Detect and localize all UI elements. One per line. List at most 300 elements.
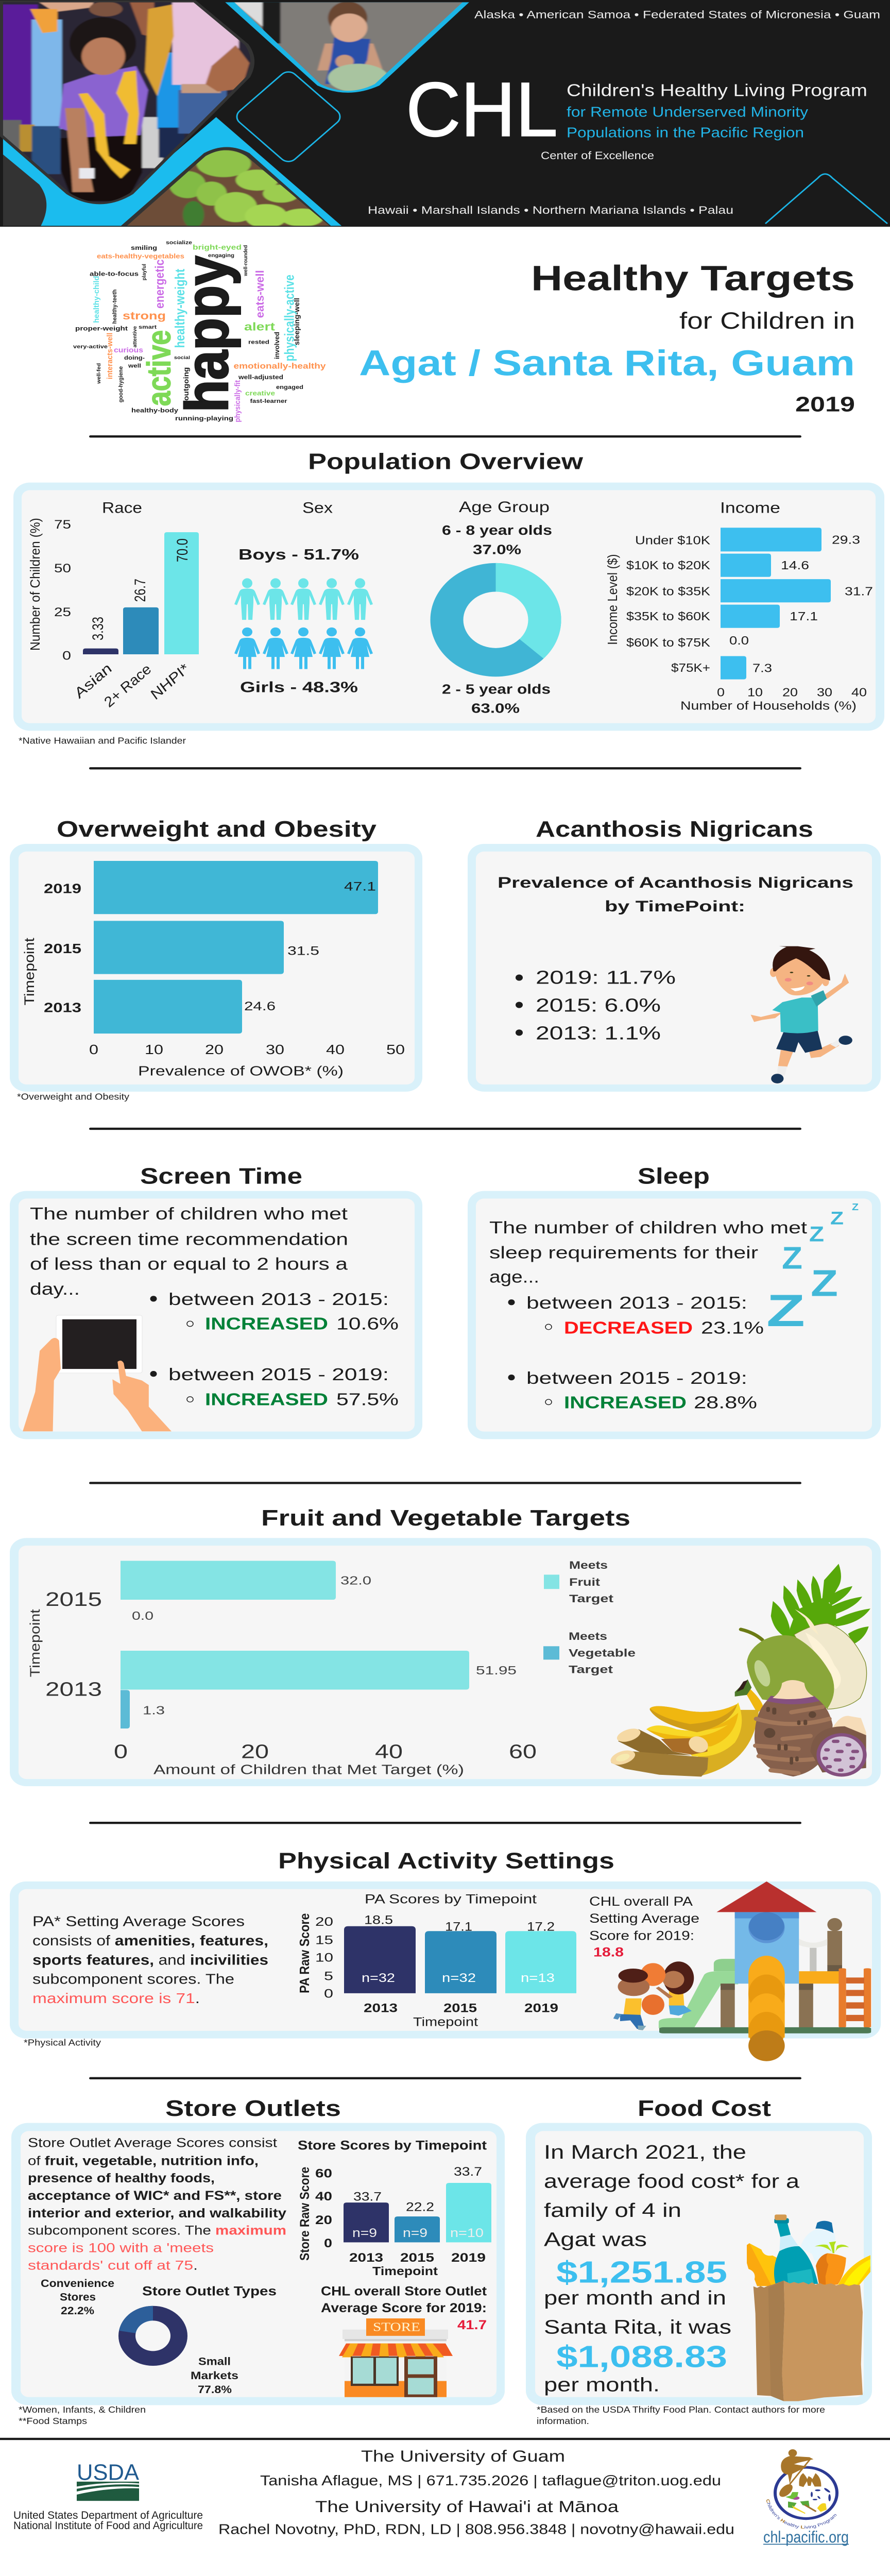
diamond outline (233, 69, 344, 165)
bar chart: OWOB: 31.5 (287, 943, 319, 958)
heading: Sleep: Sleep (638, 1164, 710, 1189)
bar chart: fruit and vegetable: Timepoint (28, 1609, 43, 1677)
word cloud: healthy-child (92, 276, 100, 323)
food cost text: In March 2021, the (544, 2141, 746, 2163)
chart: income: 17.1 (790, 610, 818, 623)
food cost text: family of 4 in (544, 2199, 681, 2221)
region list bottom: Hawaii • Marshall Islands • Northern Mariana Islands • Palau (368, 204, 733, 216)
description text (28, 2135, 286, 2273)
description text: sports features, and incivilities (32, 1952, 268, 1968)
heading: Overweight and Obesity: Overweight and Obesity (57, 817, 376, 841)
word cloud: outgoing (182, 367, 190, 401)
bar chart: PA scores: n=13 (521, 1971, 555, 1985)
panel: physical activity settings (10, 1882, 881, 2039)
food cost text: per month. (544, 2374, 660, 2396)
header banner (0, 0, 890, 228)
bar chart: store scores: Store Raw Score (298, 2167, 312, 2261)
word cloud: energetic (153, 259, 166, 309)
description text: presence of healthy foods, (28, 2171, 215, 2185)
legend: Target (569, 1664, 613, 1675)
change list: INCREASED (205, 1314, 328, 1333)
legend: Target (569, 1593, 614, 1605)
dark corner shape (3, 155, 46, 226)
word cloud: smiling (131, 244, 157, 251)
footnote: food plan: *Based on the USDA Thrifty Food Plan. Contact authors for more (537, 2404, 825, 2415)
description text: maximum score is 71 . (32, 1991, 200, 2007)
chart: race: NHPI* (146, 661, 194, 702)
intro text: day... (30, 1279, 80, 1298)
bullet list: 2015: 6.0% (536, 995, 661, 1016)
word cloud: well-fed (96, 363, 101, 384)
photo: children with leis (0, 0, 272, 210)
curved program name: C hildren's Healthy Living Program (766, 2499, 837, 2529)
footnote: WIC and FS: **Food Stamps (19, 2416, 87, 2426)
bar chart: fruit and vegetable: 20 (241, 1740, 269, 1762)
heading: Acanthosis Nigricans: Acanthosis Nigricans (536, 817, 813, 841)
bar chart: PA scores: n=32 (362, 1971, 395, 1985)
food cost text: Santa Rita, it was (544, 2316, 731, 2338)
description text (32, 1914, 268, 2007)
chart: race: 70.0 (174, 538, 191, 562)
word cloud: active (141, 330, 177, 406)
description text: PA* Setting Average Scores (32, 1914, 245, 1929)
bar chart: PA scores: 17.2 (527, 1919, 555, 1934)
panel: sleep (468, 1191, 881, 1439)
title block (359, 258, 855, 416)
chart: store outlet types donut (41, 2277, 277, 2396)
overall store score callout: Average Score for 2019: (321, 2300, 487, 2315)
icon: sleeping Zs (766, 1202, 859, 1336)
bar chart: store scores: 20 (315, 2213, 332, 2227)
bar chart: PA scores: PA Raw Score (298, 1913, 312, 1993)
title block: Agat / Santa Rita, Guam (359, 343, 855, 383)
chart: race: 26.7 (131, 579, 148, 602)
word cloud: involved (273, 332, 281, 359)
photo: toddler holding greens (225, 2, 469, 93)
word cloud: well-adjusted (238, 374, 283, 381)
chart: sex: Boys - 51.7% (238, 546, 359, 563)
heading: Physical Activity Settings: Physical Activity Settings (278, 1849, 614, 1873)
word cloud: socialize (166, 240, 192, 246)
change list: INCREASED (205, 1390, 328, 1409)
change list: between 2013 - 2015: (526, 1293, 747, 1312)
footnote: PA: *Physical Activity (24, 2038, 101, 2047)
chart: income: 10 (747, 686, 763, 699)
logo: CHL program (766, 2449, 838, 2529)
word cloud: strong (123, 310, 166, 321)
change list: 28.8% (694, 1393, 757, 1412)
footnote: OWOB: *Overweight and Obesity (17, 1092, 130, 1101)
program name: Children's Healthy Living Program (567, 81, 867, 100)
chart: income: 0 (717, 686, 725, 699)
word cloud: eats-healthy-vegetables (97, 252, 184, 260)
icon: grocery bag (747, 2214, 870, 2401)
overall PA score callout (589, 1894, 699, 1959)
icon: boys row (234, 578, 373, 620)
icon: running boy (751, 946, 852, 1083)
bar chart: store scores: Store Scores by Timepoint (298, 2138, 487, 2153)
bar chart: OWOB: 47.1 (344, 879, 376, 893)
intro text: The number of children who met (489, 1218, 807, 1238)
word cloud: attentive (132, 326, 138, 347)
heading: Population Overview: Population Overview (308, 449, 584, 474)
change list: 57.5% (336, 1390, 399, 1409)
chart: store outlet types donut: Markets (191, 2369, 238, 2382)
word cloud: very-active (73, 344, 108, 350)
bar chart: fruit and vegetable: 2013 (45, 1678, 102, 1700)
word cloud: good-hygiene (118, 366, 124, 402)
word cloud: physically-active (282, 275, 297, 361)
description text: of fruit, vegetable, nutrition info, (28, 2153, 259, 2168)
bar chart: PA scores: 5 (324, 1969, 333, 1983)
legend (543, 1560, 636, 1675)
chart: income: 20 (782, 686, 798, 699)
bar chart: OWOB: 0 (89, 1042, 98, 1057)
program name: Center of Excellence (541, 149, 654, 162)
bullet list (516, 967, 676, 1044)
chart: sex (234, 499, 373, 696)
change list: 10.6% (336, 1314, 399, 1333)
blue triangle backdrop (3, 117, 341, 226)
footnote: WIC and FS: *Women, Infants, & Children (19, 2404, 146, 2415)
bar chart: store scores: 2019 (451, 2250, 486, 2264)
legend: Meets (569, 1631, 607, 1642)
title block: Healthy Targets (531, 258, 855, 298)
word cloud: creative (245, 389, 275, 397)
bar chart: PA scores (298, 1891, 576, 2029)
word cloud: engaging (208, 253, 234, 259)
bar chart: fruit and vegetable: 40 (375, 1740, 403, 1762)
chart: race: 3.33 (89, 617, 106, 640)
word cloud: social (174, 355, 190, 361)
chart: store outlet types donut: 77.8% (198, 2383, 232, 2396)
word cloud: proper-weight (75, 325, 128, 332)
heading: Fruit and Vegetable Targets: Fruit and Vegetable Targets (261, 1505, 630, 1530)
bar chart: OWOB: 24.6 (244, 999, 276, 1013)
bar chart: fruit and vegetable (28, 1561, 537, 1777)
awning (339, 2344, 453, 2358)
overall PA score callout: Setting Average (589, 1911, 699, 1925)
icon: sleeping Zs: Z (766, 1285, 805, 1336)
footer contacts: The University of Hawai'i at Mānoa (315, 2498, 619, 2516)
bar chart: fruit and vegetable: 51.95 (476, 1664, 517, 1677)
word cloud: healthy-body (131, 406, 179, 414)
icon: store front (339, 2318, 453, 2397)
bar chart: store scores: 40 (315, 2189, 332, 2203)
chart: income (606, 499, 873, 713)
bar chart: PA scores: PA Scores by Timepoint (365, 1891, 537, 1906)
change list: between 2015 - 2019: (168, 1365, 389, 1384)
description text: interior and exterior, and walkability (28, 2206, 286, 2220)
chart: income: $35K to $60K (626, 610, 710, 623)
chart: income: Income Level ($) (606, 554, 620, 645)
bar chart: PA scores: 18.5 (364, 1912, 393, 1927)
legend: Vegetable (569, 1647, 636, 1659)
CHL wordmark: CHL (406, 66, 558, 152)
chart: income: 31.7 (845, 585, 873, 598)
panel: store outlets (11, 2123, 505, 2405)
overall PA score callout: Score for 2019: (589, 1928, 694, 1943)
bar chart: PA scores: 10 (315, 1950, 333, 1964)
chart: income: Income (720, 499, 780, 516)
change list: between 2015 - 2019: (526, 1368, 747, 1387)
description text: standards' cut off at 75 . (28, 2258, 198, 2273)
panel: population overview (13, 483, 884, 731)
icon: produce pile (608, 1564, 870, 1776)
bar chart: OWOB: Timepoint (22, 938, 37, 1005)
subheading (498, 874, 853, 915)
bullet list: 2019: 11.7% (536, 967, 676, 988)
chart: income: 0.0 (729, 634, 749, 647)
bar chart: PA scores: 17.1 (445, 1919, 472, 1934)
legend: Fruit (569, 1577, 601, 1588)
word cloud: interacts-well (105, 333, 114, 379)
title block: 2019 (795, 393, 855, 416)
heading: Food Cost: Food Cost (638, 2096, 771, 2121)
bar chart: OWOB: 2019 (44, 881, 81, 896)
chart: race: 2+ Race (99, 662, 155, 710)
bar chart: store scores: 0 (324, 2236, 332, 2250)
bar chart: store scores: n=9 (352, 2226, 377, 2240)
chart: race: 25 (54, 605, 71, 619)
word cloud: well (128, 362, 141, 369)
bar chart: PA scores: 0 (324, 1986, 333, 2001)
bar chart: store scores: 60 (315, 2166, 332, 2180)
word cloud: sleeping-well (293, 298, 301, 345)
bar chart: store scores: 2015 (400, 2250, 434, 2264)
logo: USDA: USDA (77, 2460, 140, 2485)
photo: lettuce rows (121, 144, 338, 228)
chart: race: Number of Children (%) (28, 518, 43, 651)
icon: tablet with hands (23, 1315, 172, 1431)
intro text: the screen time recommendation (30, 1230, 348, 1249)
panel: screen time (10, 1191, 422, 1439)
word cloud: playful (141, 264, 147, 280)
bar chart: store scores (298, 2138, 491, 2278)
bar chart: OWOB: 30 (266, 1042, 284, 1057)
program name (541, 81, 867, 162)
chart: age group donut (431, 498, 561, 716)
chart: sex: Girls - 48.3% (240, 679, 358, 696)
overall PA score callout: CHL overall PA (589, 1894, 693, 1908)
food cost text: $1,088.83 (556, 2340, 727, 2374)
footer contacts: Tanisha Aflague, MS | 671.735.2026 | taflague@triton.uog.edu (260, 2473, 721, 2488)
word cloud: happy (174, 256, 241, 412)
chart: race (28, 499, 199, 710)
overall PA score callout: 18.8 (593, 1945, 624, 1959)
overall store score callout (321, 2284, 487, 2332)
icon: store front: STORE (373, 2320, 420, 2334)
bar chart: fruit and vegetable: 32.0 (340, 1574, 371, 1587)
logo: USDA: National Institute of Food and Agriculture (13, 2519, 203, 2531)
bar chart: PA scores: 2019 (524, 2001, 558, 2015)
bar chart: PA scores: n=32 (442, 1971, 476, 1985)
panel: acanthosis nigricans (468, 844, 881, 1092)
chart: income: 29.3 (832, 533, 860, 547)
chart: income: 40 (851, 686, 867, 699)
subheading: Prevalence of Acanthosis Nigricans (498, 874, 853, 891)
bar chart: store scores: 2013 (349, 2250, 383, 2264)
title block: for Children in (679, 308, 855, 334)
chart: store outlet types donut: Small (198, 2355, 231, 2367)
chart: age group donut: 6 - 8 year olds (442, 523, 552, 538)
change list (508, 1293, 764, 1412)
overall store score callout: CHL overall Store Outlet (321, 2284, 487, 2298)
vegetables (785, 2492, 827, 2513)
bar chart: fruit and vegetable: 0.0 (132, 1609, 153, 1623)
bar chart: store scores: 33.7 (454, 2164, 482, 2179)
footnote: food plan: information. (537, 2416, 589, 2426)
word cloud: bright-eyed (193, 243, 242, 251)
food cost text: $1,251.85 (556, 2256, 727, 2290)
change list: DECREASED (564, 1318, 693, 1337)
chart: store outlet types donut: Convenience (41, 2277, 114, 2290)
word cloud: doing- (124, 354, 145, 361)
word cloud: emotionally-healthy (234, 361, 326, 370)
bar chart: store scores: 22.2 (406, 2199, 434, 2214)
chart: race: 0 (62, 648, 71, 663)
intro text (489, 1218, 807, 1286)
description text: subcomponent scores. The (32, 1972, 234, 1987)
icon: sleeping Zs: Z (782, 1241, 802, 1276)
description text: subcomponent scores. The maximum (28, 2223, 286, 2238)
bar chart: fruit and vegetable: 60 (509, 1740, 537, 1762)
overall store score callout: 41.7 (457, 2317, 487, 2332)
chart: income: 7.3 (752, 662, 772, 675)
logo: USDA (13, 2460, 203, 2531)
word cloud: engaged (276, 384, 303, 391)
bar chart: PA scores: 2013 (364, 2001, 398, 2015)
chart: income: $75K+ (671, 661, 710, 674)
food cost text: per month and in (544, 2287, 726, 2309)
chart: store outlet types donut: Stores (60, 2291, 96, 2303)
bar chart: OWOB: 2013 (44, 1000, 81, 1015)
bar chart: store scores: Timepoint (372, 2264, 438, 2278)
footnote: food plan (537, 2404, 825, 2426)
word cloud: rested (248, 338, 269, 345)
chart: race: Race (102, 499, 142, 516)
word cloud: smart (139, 325, 157, 330)
intro text (30, 1205, 348, 1298)
word cloud: healthy-weight (173, 269, 187, 348)
chart: income: $60K to $75K (626, 636, 710, 650)
footnote: NHPI: *Native Hawaiian and Pacific Islander (19, 736, 186, 745)
program name: Populations in the Pacific Region (567, 125, 804, 141)
word cloud: well-rounded (243, 245, 248, 277)
icon: sleeping Zs: Z (809, 1222, 824, 1246)
word cloud: physically-fit (233, 380, 242, 422)
footer contacts (218, 2447, 734, 2537)
chart: income: Under $10K (635, 534, 710, 547)
bar chart: OWOB: 50 (386, 1042, 405, 1057)
paddler figure (777, 2449, 821, 2499)
icon: sleeping Zs: Z (811, 1263, 838, 1304)
chart: age group donut: 2 - 5 year olds (442, 682, 551, 697)
logo: USDA: United States Department of Agriculture (13, 2509, 203, 2521)
link: chl-pacific.org: chl-pacific.org (763, 2528, 849, 2546)
chart: income: 14.6 (781, 559, 809, 572)
chart: age group donut: Age Group (459, 498, 550, 515)
description text: score is 100 with a 'meets (28, 2240, 214, 2255)
bar chart: store scores: n=10 (450, 2226, 484, 2240)
icon: playground (613, 1882, 871, 2061)
change list: 23.1% (701, 1318, 764, 1337)
bar chart: OWOB (22, 861, 405, 1078)
change list (150, 1290, 399, 1409)
change list: between 2013 - 2015: (168, 1290, 389, 1309)
word cloud: eats-well (254, 270, 266, 318)
panel: fruit and vegetable targets (10, 1538, 881, 1786)
bar chart: PA scores: 2015 (443, 2001, 477, 2015)
description text: acceptance of WIC* and FS**, store (28, 2188, 282, 2203)
footer contacts: Rachel Novotny, PhD, RDN, LD | 808.956.3848 | novotny@hawaii.edu (218, 2521, 734, 2537)
bar chart: OWOB: Prevalence of OWOB* (%) (138, 1063, 344, 1078)
chart: race: Asian (69, 661, 116, 701)
bar chart: fruit and vegetable: 2015 (45, 1588, 102, 1611)
intro text: age... (489, 1267, 539, 1286)
food cost text (544, 2141, 799, 2396)
footer contacts: The University of Guam (361, 2447, 565, 2465)
chart: sex: Sex (302, 499, 333, 516)
bar chart: fruit and vegetable: Amount of Children that Met Target (%) (153, 1762, 464, 1777)
chart: age group donut: 37.0% (473, 542, 521, 557)
word cloud: able-to-focus (90, 270, 139, 277)
chart: income: Number of Households (%) (680, 699, 857, 713)
word cloud: fast-learner (250, 398, 287, 404)
bar chart: PA scores: 15 (315, 1933, 333, 1947)
intro text: of less than or equal to 2 hours a (30, 1255, 348, 1274)
bar chart: fruit and vegetable: 0 (114, 1740, 128, 1762)
icon: sleeping Zs: Z (830, 1208, 844, 1229)
fish ring (811, 2487, 831, 2501)
footnote: WIC and FS (19, 2404, 146, 2426)
food cost text: average food cost* for a (544, 2170, 799, 2192)
panel: food cost (526, 2123, 872, 2405)
change list: INCREASED (564, 1393, 687, 1412)
chart: race: 50 (54, 561, 71, 575)
word cloud: curious (114, 346, 143, 354)
chart: store outlet types donut: 22.2% (61, 2304, 94, 2317)
children with basketballs (613, 1961, 694, 2030)
bullet list: 2013: 1.1% (536, 1023, 661, 1044)
word cloud: alert (244, 320, 275, 333)
icon: girls row (234, 628, 373, 669)
bar chart: PA scores: 20 (315, 1914, 333, 1928)
word cloud: running-playing (175, 415, 233, 422)
bar chart: fruit and vegetable: 1.3 (143, 1704, 165, 1717)
bar chart: store scores: 33.7 (353, 2189, 382, 2204)
bar chart: store scores: n=9 (403, 2226, 427, 2240)
bar chart: OWOB: 2015 (44, 941, 81, 956)
bar chart: OWOB: 40 (326, 1042, 345, 1057)
food cost text: Agat was (544, 2228, 647, 2250)
bar chart: OWOB: 10 (145, 1042, 163, 1057)
heading: Screen Time: Screen Time (140, 1164, 302, 1189)
heading: Store Outlets: Store Outlets (165, 2096, 341, 2121)
word cloud: healthy-teeth (112, 290, 118, 324)
chart: income: 30 (817, 686, 832, 699)
chart: race: 75 (54, 517, 71, 532)
icon: sleeping Zs: Z (852, 1202, 859, 1213)
description text: consists of amenities, features, (32, 1933, 268, 1949)
bar chart: PA scores: Timepoint (413, 2014, 478, 2029)
bar chart: OWOB: 20 (205, 1042, 224, 1057)
chart: income: $20K to $35K (626, 585, 710, 598)
triangle outline (765, 174, 887, 224)
legend: Meets (569, 1560, 608, 1571)
word cloud (73, 240, 326, 422)
chart: age group donut: 63.0% (471, 701, 520, 716)
